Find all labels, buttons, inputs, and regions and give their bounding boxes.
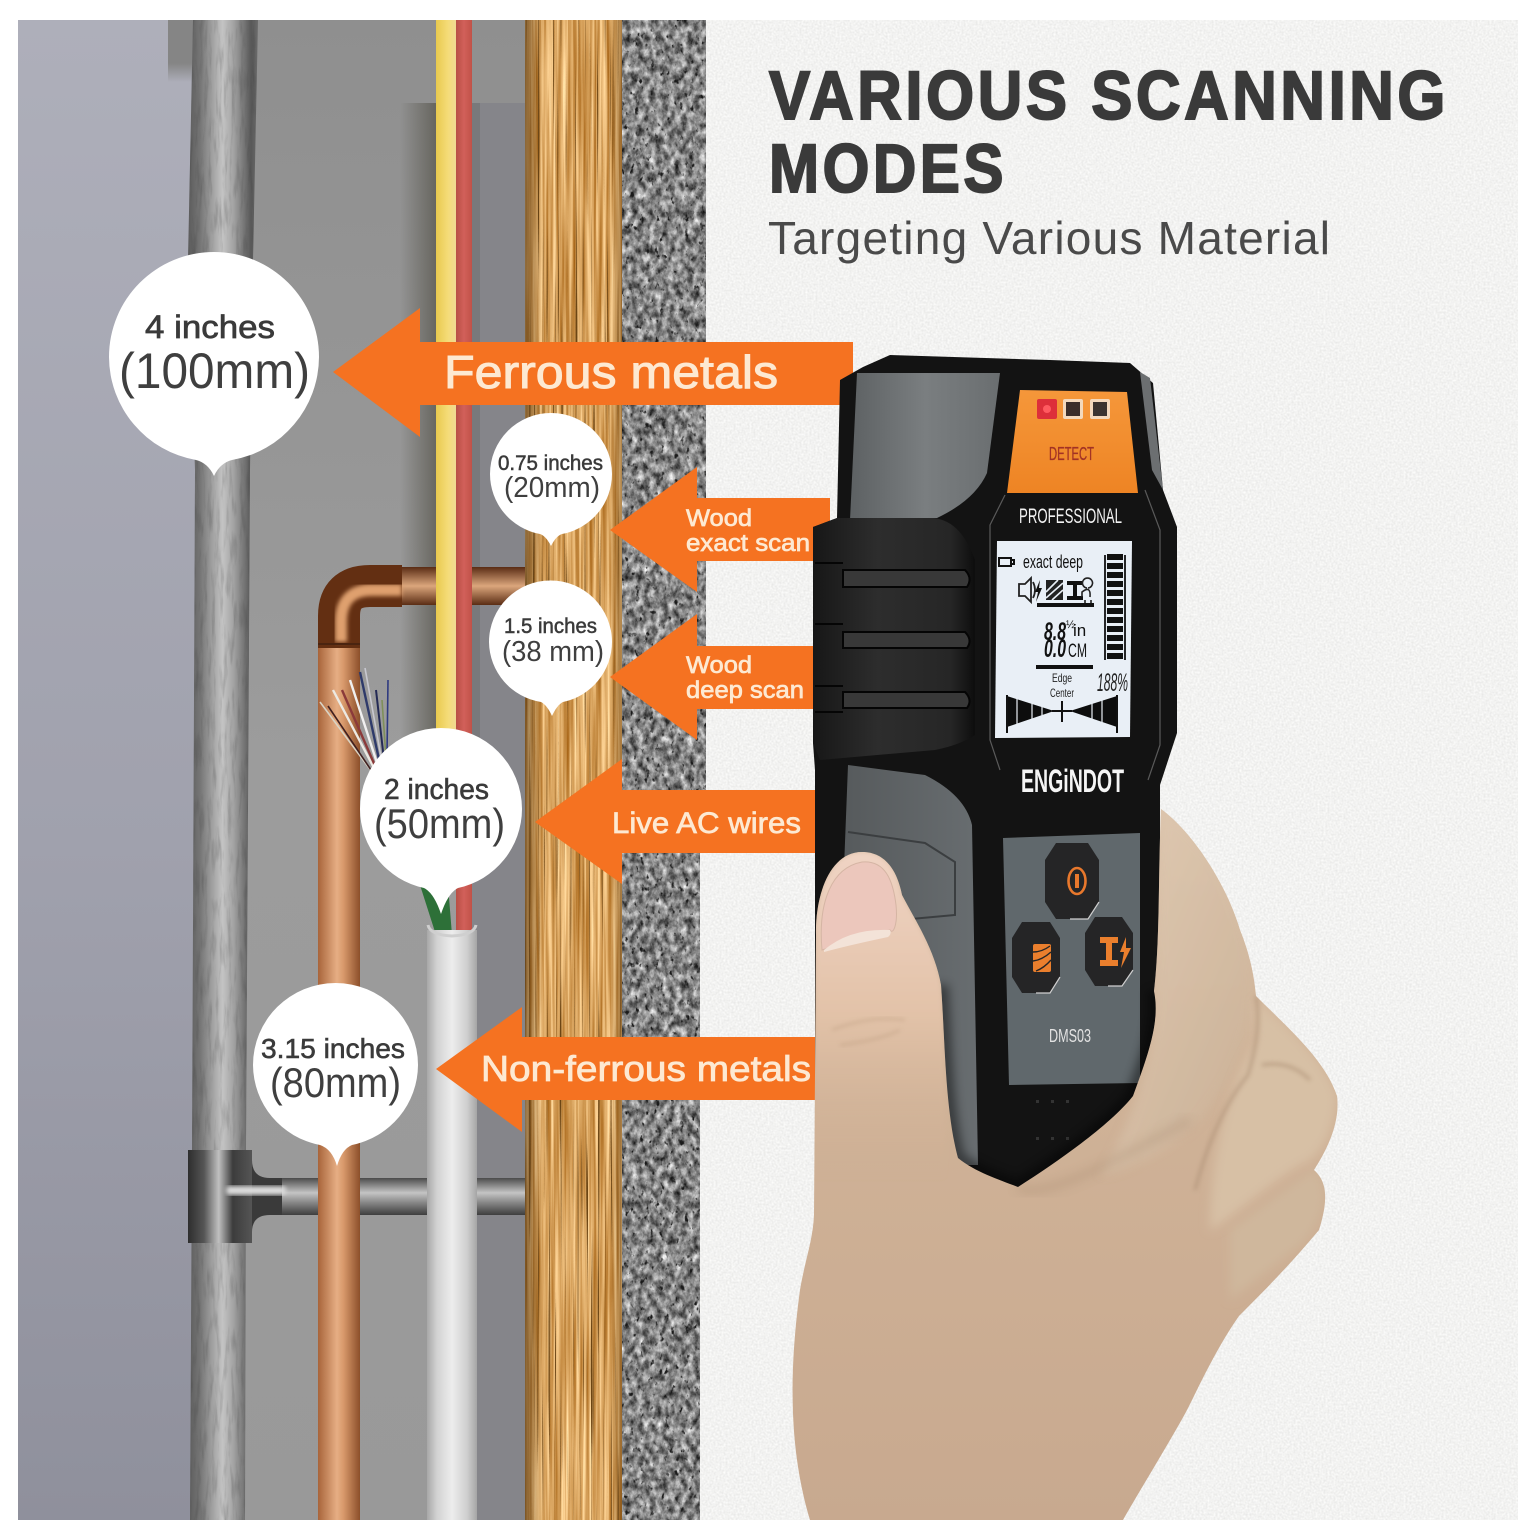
knuckle highlight	[1210, 1000, 1337, 1230]
callout: 4 inches: (100mm)	[119, 343, 310, 399]
brand logo: ENGiNDOT	[1021, 763, 1124, 799]
title	[769, 57, 1449, 207]
callout: 0.75 inches: 0.75 inches	[498, 452, 603, 475]
arrow: wood deep scan: deep scan	[686, 677, 804, 704]
arrow: wood deep scan: Wood	[686, 652, 752, 679]
metal and AC mode button	[1085, 917, 1133, 986]
thumb knuckle crease	[832, 1019, 905, 1045]
arrow: wood deep scan	[610, 614, 830, 740]
person icon	[1082, 578, 1092, 604]
title: VARIOUS SCANNING	[769, 57, 1449, 134]
arrow: wood exact scan: exact scan	[686, 530, 810, 557]
callout: 1.5 inches: 1.5 inches	[504, 615, 597, 638]
separator top	[1037, 603, 1094, 607]
arrow: non-ferrous metals	[436, 1007, 830, 1132]
arrow: ferrous metals	[333, 308, 853, 437]
callout: 3.15 inches	[253, 983, 418, 1166]
metal I icon	[1067, 581, 1083, 600]
LED indicators	[1037, 399, 1110, 419]
lower grey side panel	[835, 765, 978, 1165]
callout: 3.15 inches: 3.15 inches	[261, 1033, 405, 1064]
subtitle: Targeting Various Material	[768, 212, 1330, 264]
callout: 1.5 inches	[489, 580, 612, 716]
grip ridges	[815, 563, 970, 712]
cut network cable strands	[320, 668, 388, 772]
wrapped finger highlight	[1110, 819, 1254, 1169]
lower finger	[1236, 1213, 1308, 1284]
fraction: ½	[1066, 619, 1075, 631]
panel: white plaster wall	[700, 20, 1518, 1520]
callout: 0.75 inches: (20mm)	[504, 472, 600, 504]
inch unit: in	[1073, 621, 1086, 640]
bolt icon	[1035, 580, 1042, 602]
arrow: live AC wires: Live AC wires	[612, 807, 801, 840]
device: stud finder	[813, 355, 1177, 1195]
callout: 4 inches: 4 inches	[145, 309, 275, 345]
device body	[813, 355, 1177, 1195]
panel: grey interior wall	[18, 20, 530, 1520]
centering bow-tie	[1007, 693, 1117, 733]
icon: holding hand	[793, 809, 1338, 1520]
edge label: Edge	[1052, 671, 1072, 685]
thumb tint	[815, 852, 946, 1070]
callout: 2 inches	[360, 728, 522, 914]
steel pipe with T fitting	[185, 20, 527, 1520]
right grey side strip	[1140, 372, 1163, 490]
orange detect panel	[1007, 390, 1138, 493]
wood icon	[1046, 580, 1063, 600]
electrical cables in conduit	[420, 20, 477, 1520]
wood mode button	[1012, 922, 1060, 993]
inch reading: 8.8	[1044, 618, 1066, 646]
power button	[1045, 843, 1099, 919]
callout: 2 inches: 2 inches	[384, 774, 489, 806]
center label: Center	[1050, 686, 1074, 700]
callout: 4 inches	[109, 252, 319, 476]
callout: 2 inches: (50mm)	[374, 800, 505, 847]
professional label: PROFESSIONAL	[1019, 505, 1122, 528]
hand soft shadow on device	[941, 985, 1156, 1187]
signal ladder	[1105, 555, 1125, 660]
detect label: DETECT	[1049, 444, 1094, 464]
cm reading: 0.0	[1044, 635, 1066, 663]
callout: 3.15 inches: (80mm)	[270, 1059, 401, 1106]
model label: DMS03	[1049, 1026, 1091, 1046]
arrow: ferrous metals: Ferrous metals	[444, 346, 778, 398]
copper pipe with elbow	[318, 567, 527, 1520]
panel: concrete wall section	[622, 20, 706, 1520]
separator bottom	[1036, 665, 1093, 669]
arrow: wood exact scan: Wood	[686, 505, 752, 532]
button panel	[1003, 833, 1140, 1085]
arrow: live AC wires	[535, 759, 830, 884]
battery icon	[999, 558, 1014, 566]
speaker icon	[1019, 578, 1035, 602]
nail lunula	[824, 930, 891, 952]
callout: 1.5 inches: (38 mm)	[502, 636, 604, 668]
top grey housing panel	[850, 373, 1000, 520]
arrow: non-ferrous metals: Non-ferrous metals	[481, 1048, 811, 1089]
LCD screen	[995, 541, 1132, 738]
mode words: exact deep	[1023, 552, 1083, 572]
panel: wood stud	[525, 20, 622, 1520]
callout: 0.75 inches	[490, 413, 612, 546]
speaker holes	[1036, 1100, 1069, 1140]
bezel highlight lines	[990, 490, 1160, 780]
finger crease	[1195, 996, 1310, 1190]
thumbnail	[821, 862, 896, 950]
title: MODES	[769, 130, 1007, 207]
cm unit: CM	[1068, 641, 1087, 662]
arrow: wood exact scan	[610, 467, 830, 592]
rubber grip band	[813, 518, 975, 760]
LCD screen: 188%	[1097, 669, 1128, 697]
